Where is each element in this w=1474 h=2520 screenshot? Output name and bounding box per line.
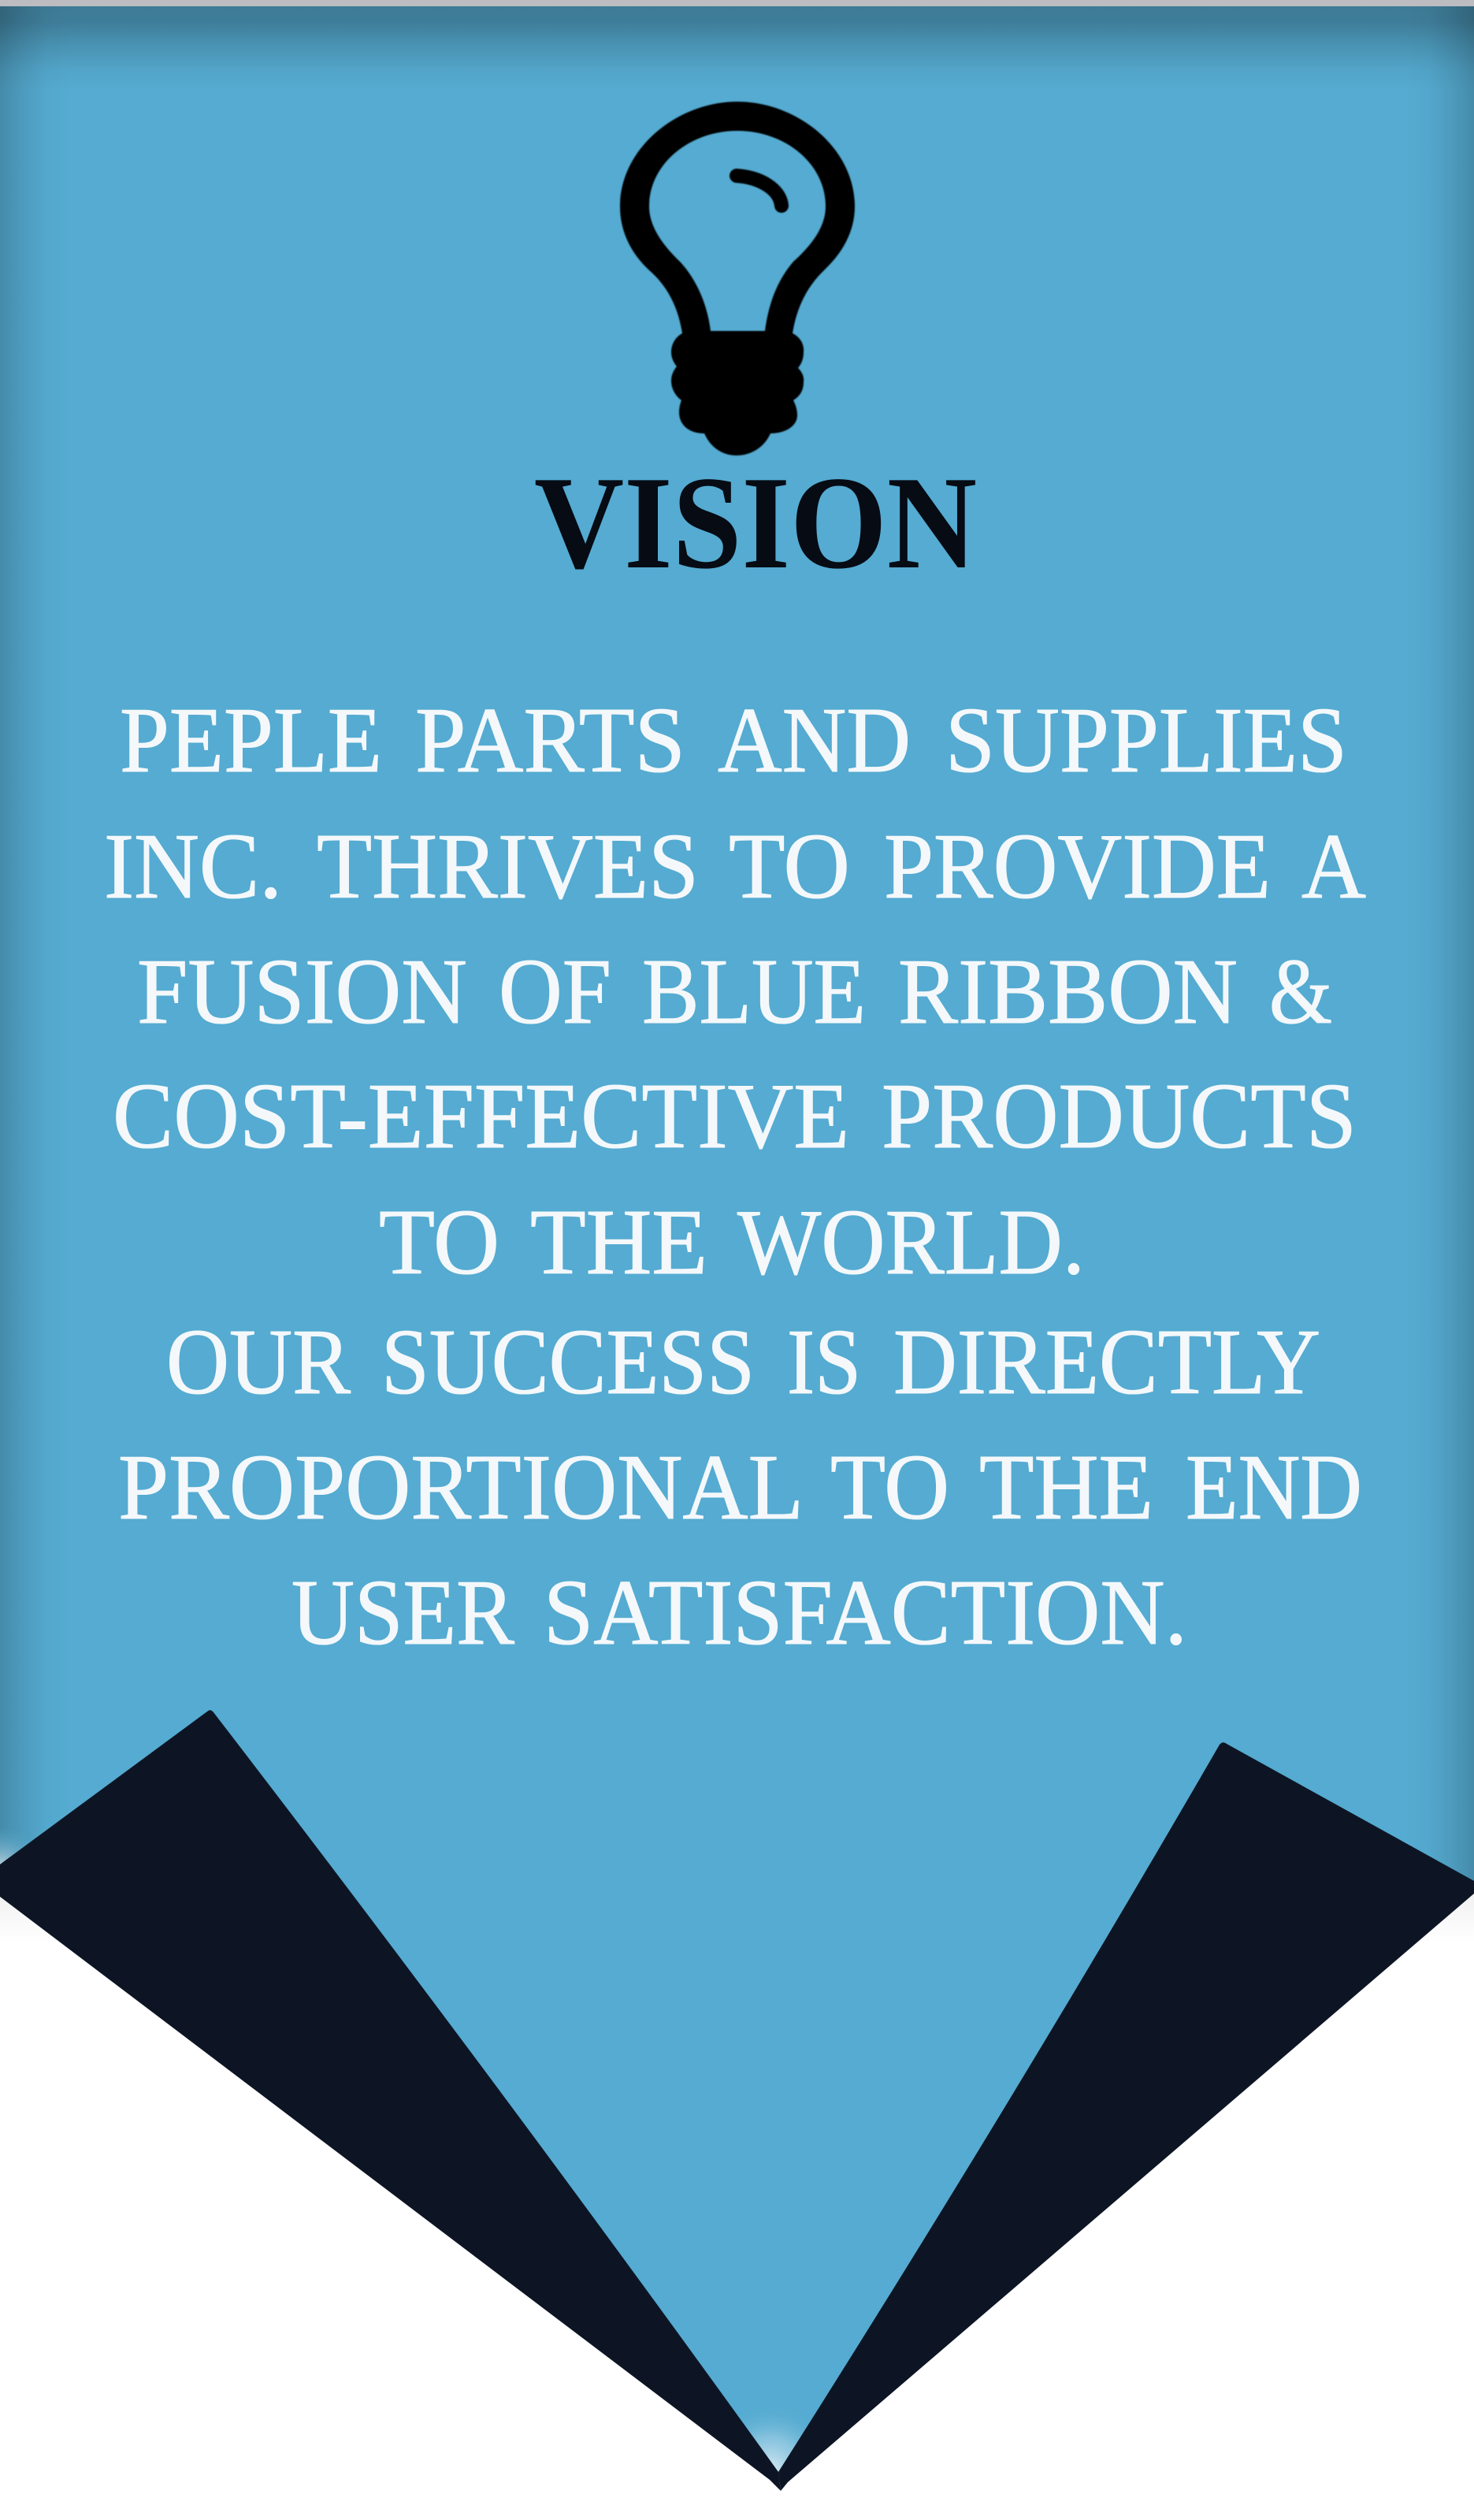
line 2: TO	[729, 814, 850, 918]
line 8: USER	[291, 1560, 515, 1664]
line 7: TO	[830, 1435, 949, 1539]
line 3: BLUE	[642, 939, 866, 1043]
line 1	[120, 688, 1347, 792]
line 3: RIBBON	[898, 939, 1238, 1043]
line 3: OF	[499, 939, 611, 1043]
line 3	[137, 939, 1332, 1043]
line 8: SATISFACTION.	[544, 1560, 1187, 1664]
icon: light bulb	[620, 102, 855, 455]
right dark ribbon fold	[778, 1742, 1474, 2491]
heading: VISION: VISION	[534, 448, 977, 597]
line 4: PRODUCTS	[882, 1064, 1357, 1168]
vision statement text	[104, 688, 1366, 1664]
left dark ribbon fold	[0, 1710, 781, 2491]
line 3: FUSION	[137, 939, 467, 1043]
line 1: SUPPLIES	[945, 688, 1347, 792]
line 2: PROVIDE	[884, 814, 1271, 918]
line 5: TO	[379, 1190, 499, 1294]
line 7: PROPORTIONAL	[118, 1435, 804, 1539]
line 5: WORLD.	[737, 1190, 1085, 1294]
line 2: INC.	[104, 814, 282, 918]
line 6: DIRECTLY	[893, 1310, 1320, 1414]
line 2: THRIVES	[317, 814, 699, 918]
line 2	[104, 814, 1366, 918]
line 5	[379, 1190, 1085, 1294]
top grey strip	[0, 0, 1474, 6]
line 6: OUR	[166, 1310, 351, 1414]
line 6: SUCCESS	[381, 1310, 755, 1414]
line 6	[166, 1310, 1320, 1414]
line 1: PEPLE	[120, 688, 382, 792]
line 5: THE	[530, 1190, 707, 1294]
line 7: END	[1186, 1435, 1362, 1539]
line 8	[291, 1560, 1187, 1664]
line 4: COST-EFFECTIVE	[113, 1064, 849, 1168]
line 3: &	[1269, 939, 1332, 1043]
line 4	[113, 1064, 1357, 1168]
line 6: IS	[787, 1310, 861, 1414]
line 7: THE	[979, 1435, 1153, 1539]
line 1: AND	[718, 688, 911, 792]
line 1: PARTS	[415, 688, 685, 792]
line 2: A	[1301, 814, 1366, 918]
soft shadow below banner	[0, 1879, 1474, 1942]
line 7	[118, 1435, 1362, 1539]
